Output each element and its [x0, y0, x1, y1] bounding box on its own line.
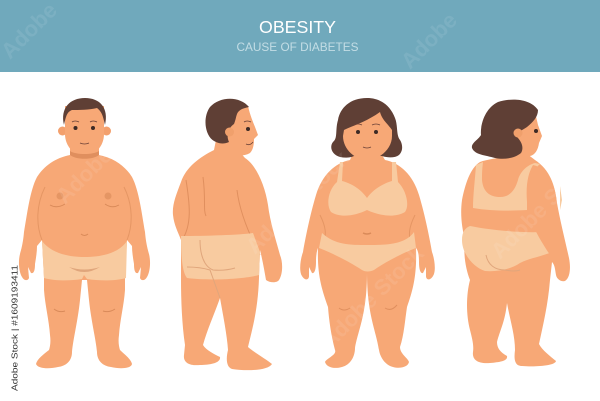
man back hair	[205, 99, 249, 144]
title: OBESITY	[259, 17, 336, 37]
man front head	[58, 98, 111, 159]
man back shorts	[181, 233, 260, 279]
subtitle: CAUSE OF DIABETES	[236, 40, 358, 54]
stock id caption: Adobe Stock | #1609193411	[10, 265, 20, 391]
man front body	[19, 146, 150, 368]
woman front briefs	[319, 232, 416, 272]
woman front body	[300, 155, 435, 368]
watermarks: Adobe Stock	[241, 145, 354, 259]
watermarks: Adobe Stock	[51, 95, 164, 209]
woman back bra	[473, 162, 540, 211]
man front shorts	[42, 241, 127, 280]
woman back briefs	[462, 226, 552, 271]
woman back body	[461, 150, 570, 366]
figure: woman, back view	[461, 100, 570, 366]
man back head	[205, 99, 258, 156]
man back body	[173, 140, 282, 370]
watermarks: Adobe	[396, 7, 462, 74]
man front belly and chest	[38, 187, 131, 240]
woman front hair and head	[331, 98, 402, 160]
watermarks: Adobe Stock	[486, 150, 599, 264]
woman back hair and head	[472, 100, 542, 159]
figure: woman, front view	[300, 98, 435, 368]
figure: man, back view	[173, 99, 282, 370]
man front hair	[63, 98, 106, 125]
header banner	[0, 0, 600, 72]
watermarks: Adobe Stock	[316, 240, 429, 354]
figure: man, front view	[19, 98, 150, 368]
woman front bra	[328, 162, 407, 216]
woman back arm	[527, 165, 565, 262]
